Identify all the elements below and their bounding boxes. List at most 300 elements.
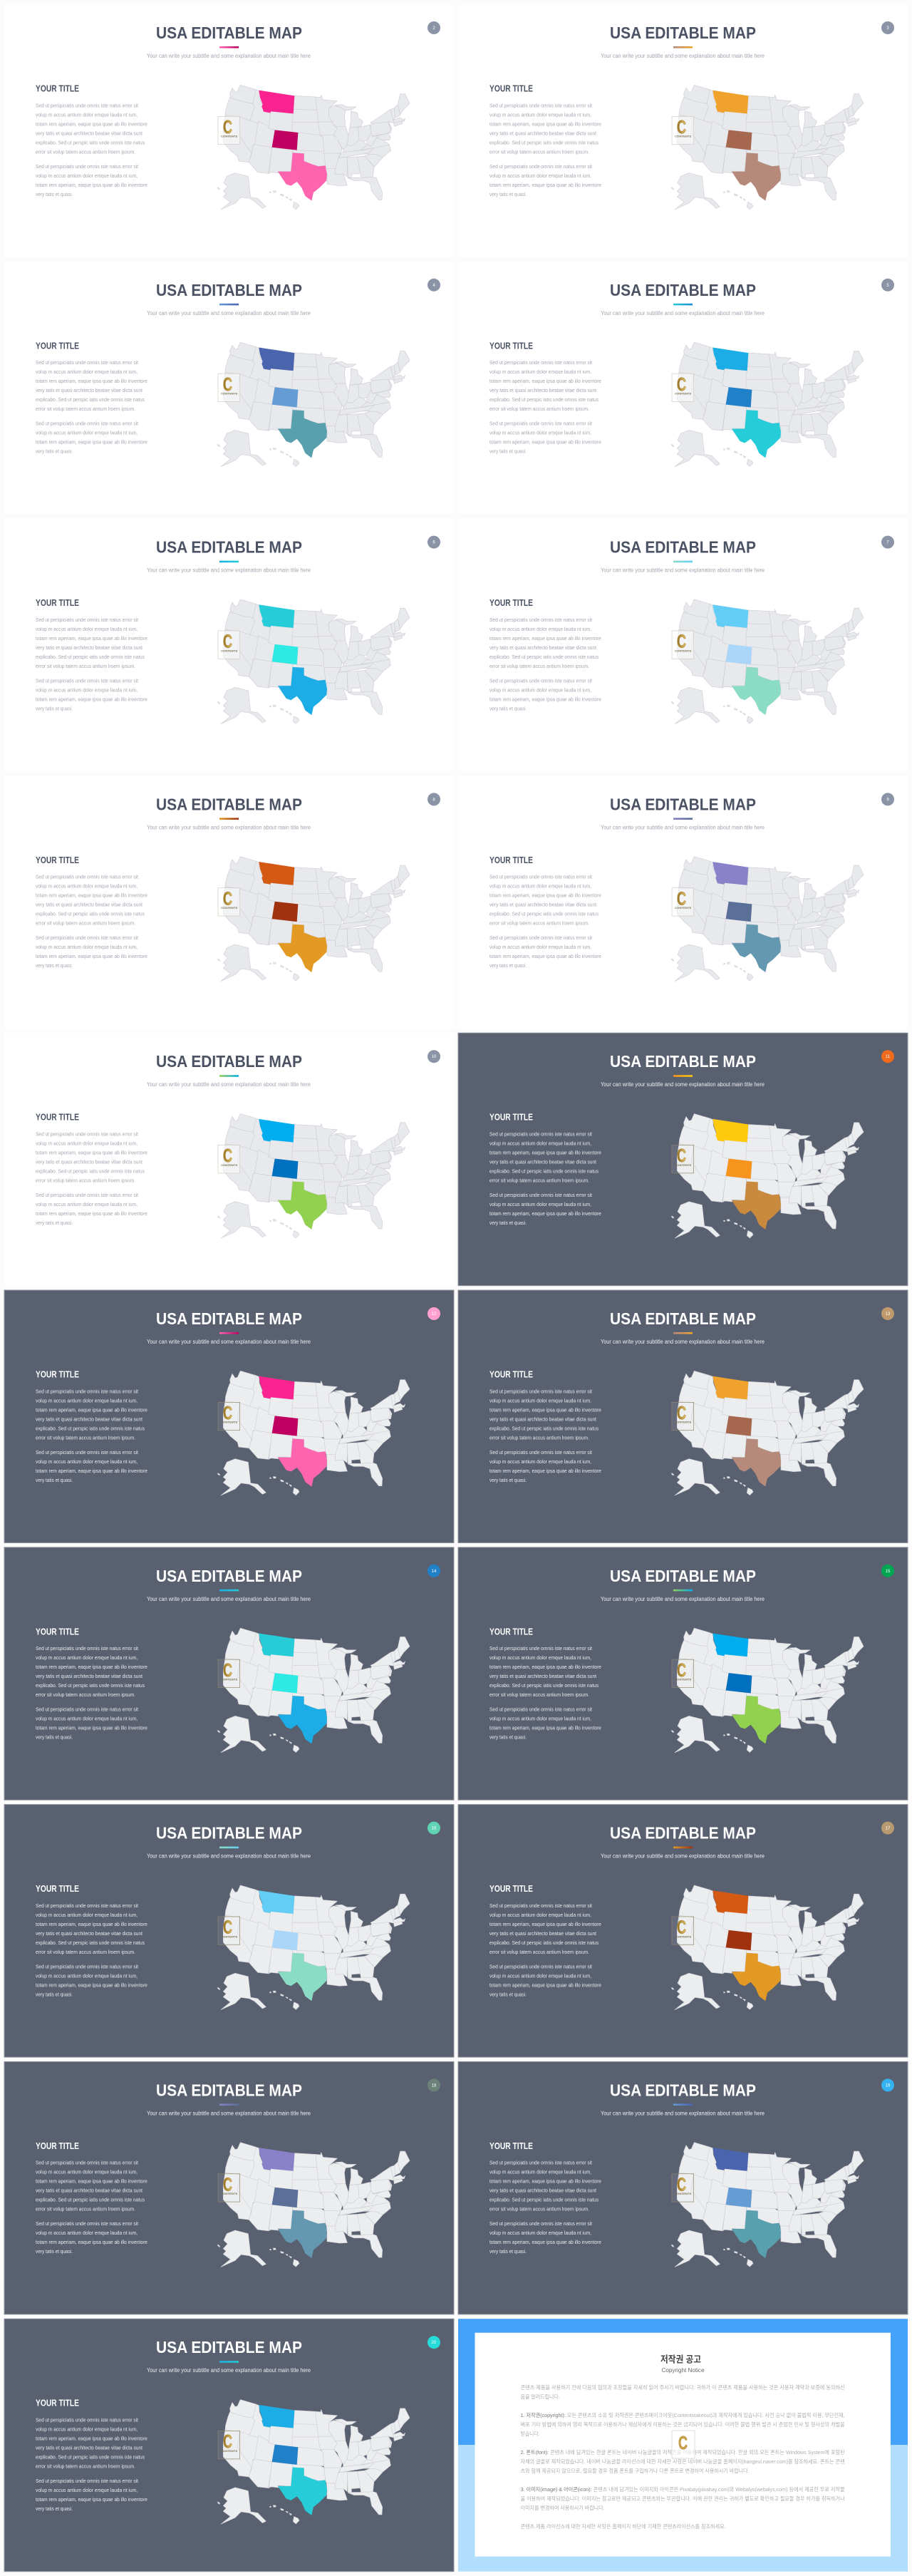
body text: Sed ut perspiciatis unde omnis iste natus error sit xyxy=(489,1130,592,1137)
blue band top xyxy=(458,2319,908,2445)
page number badge xyxy=(881,536,894,549)
intro paragraph: 콘텐츠 제품을 사용하기 전에 다음의 협의과 조항들을 자세히 읽어 주시기 바랍니다. 귀하가 이 콘텐츠 제품을 사용하는 것은 사용자 계약과 보증에 동의하신 xyxy=(521,2384,845,2391)
body text xyxy=(489,1902,601,1997)
section font: 2. 폰트(font): 콘텐츠 내에 담겨있는 한글 폰트는 네이버 나눔글꼴의 저작권을 이용하여 제작되었습니다. 한글 외의 모든 폰트는 Windows System에 포함된 xyxy=(521,2449,845,2456)
body text: error sit volup tatem accus antium lroem ipsum. xyxy=(489,920,589,927)
body text: very tatis et quasi architecto beatae vitae dicta sunt xyxy=(36,1930,142,1937)
page number badge: 19 xyxy=(886,2083,891,2088)
body text: volup m accus antium dolor emque lauda nt ium, xyxy=(489,1912,591,1918)
body text: error sit volup tatem accus antium lroem ipsum. xyxy=(489,663,589,669)
map of USA: C xyxy=(223,631,232,652)
body text: Sed ut perspiciatis unde omnis iste natus error sit xyxy=(489,102,592,108)
map of USA xyxy=(671,857,864,981)
panel: slide 18 xyxy=(4,2061,454,2314)
body text: error sit volup tatem accus antium lroem ipsum. xyxy=(489,148,589,155)
subtitle: Your can write your subtitle and some explanation about main title here xyxy=(601,1081,765,1088)
accent bar xyxy=(219,1847,239,1848)
body text: volup m accus antium dolor emque lauda nt ium, xyxy=(36,369,138,375)
logo watermark: C xyxy=(678,2432,688,2453)
body text xyxy=(36,1645,147,1741)
map of USA: C xyxy=(223,1145,232,1166)
body text: error sit volup tatem accus antium lroem ipsum. xyxy=(36,2463,135,2469)
body text: explicabo. Sed ut perspic iatis unde omnis iste natus xyxy=(36,1939,145,1946)
slide background xyxy=(4,519,454,771)
map of USA: C xyxy=(677,1659,686,1681)
body text: volup m accus antium dolor emque lauda nt ium, xyxy=(489,1716,591,1722)
slide background xyxy=(4,776,454,1029)
body text: Sed ut perspiciatis unde omnis iste natus error sit xyxy=(36,1449,138,1456)
white card xyxy=(475,2333,891,2557)
heading: YOUR TITLE xyxy=(36,1884,79,1894)
heading: YOUR TITLE xyxy=(36,1627,79,1637)
page number badge: 14 xyxy=(432,1570,437,1574)
subtitle: Your can write your subtitle and some explanation about main title here xyxy=(147,1596,311,1602)
slide background xyxy=(4,1547,454,1800)
slide background xyxy=(458,776,908,1029)
body text: explicabo. Sed ut perspic iatis unde omnis iste natus xyxy=(36,2453,145,2460)
title: USA EDITABLE MAP xyxy=(610,795,756,813)
body text: totam rem aperiam, eaque ipsa quae ab illo inventore xyxy=(489,892,601,899)
body text: very tatis et quasi. xyxy=(489,1991,527,1997)
heading english: Copyright Notice xyxy=(661,2366,705,2374)
body text: Sed ut perspiciatis unde omnis iste natus error sit xyxy=(489,1706,592,1713)
body text: very tatis et quasi. xyxy=(489,1477,527,1483)
body text: Sed ut perspiciatis unde omnis iste natus error sit xyxy=(36,102,138,108)
panel: slide 19 xyxy=(458,2061,908,2314)
body text: very tatis et quasi architecto beatae vitae dicta sunt xyxy=(36,2188,142,2194)
body text: totam rem aperiam, eaque ipsa quae ab illo inventore xyxy=(36,1921,147,1927)
body text: totam rem aperiam, eaque ipsa quae ab illo inventore xyxy=(489,439,601,445)
subtitle: Your can write your subtitle and some explanation about main title here xyxy=(147,1853,311,1860)
panel: copyright notice xyxy=(458,2319,908,2572)
body text: very tatis et quasi. xyxy=(489,191,527,197)
body text: very tatis et quasi architecto beatae vitae dicta sunt xyxy=(489,1930,596,1937)
section copyright: 배포 기타 방법에 의하여 영리 목적으로 이용하거나 제삼자에게 이용하는 것은 금지되어 있습니다. 이러한 불법 행위 발견 시 준엄한 민사 및 형사상의 처벌을 xyxy=(521,2421,845,2428)
title: USA EDITABLE MAP xyxy=(156,538,302,557)
body text: very tatis et quasi. xyxy=(36,1477,73,1483)
slide background xyxy=(458,4,908,257)
body text: Sed ut perspiciatis unde omnis iste natus error sit xyxy=(489,1388,592,1394)
map of USA: CONTENTS xyxy=(221,135,238,138)
body text xyxy=(36,102,147,197)
map of USA: C xyxy=(223,1659,232,1681)
title: USA EDITABLE MAP xyxy=(156,795,302,813)
body text: volup m accus antium dolor emque lauda nt ium, xyxy=(36,883,138,890)
page number badge xyxy=(881,1307,894,1320)
body text: error sit volup tatem accus antium lroem ipsum. xyxy=(36,148,135,155)
map of USA: C xyxy=(223,116,232,138)
body text: error sit volup tatem accus antium lroem ipsum. xyxy=(36,2206,135,2212)
body text: totam rem aperiam, eaque ipsa quae ab illo inventore xyxy=(489,1982,601,1988)
slide background xyxy=(4,1805,454,2057)
body text: volup m accus antium dolor emque lauda nt ium, xyxy=(36,1716,138,1722)
body text: very tatis et quasi. xyxy=(36,191,73,197)
subtitle: Your can write your subtitle and some explanation about main title here xyxy=(147,824,311,830)
page number badge xyxy=(428,279,440,292)
panel: slide 7 xyxy=(458,519,908,771)
map of USA: CONTENTS xyxy=(221,1163,238,1167)
body text: totam rem aperiam, eaque ipsa quae ab illo inventore xyxy=(36,2239,147,2245)
page number badge: 2 xyxy=(432,26,435,31)
page number badge: 13 xyxy=(886,1312,891,1317)
body text: very tatis et quasi. xyxy=(36,705,73,711)
section images and icons: 을 이용하여 제작되었습니다. 이미지는 참고로만 제공되고 콘텐츠와는 무관합니다. 이에 관한 권리는 귀하가 별도로 확인하고 필요할 경우 허가를 취득하거나 xyxy=(521,2495,845,2502)
page number badge xyxy=(428,2336,440,2349)
body text: volup m accus antium dolor emque lauda nt ium, xyxy=(489,2169,591,2175)
map of USA: CONTENTS xyxy=(675,906,692,910)
subtitle: Your can write your subtitle and some explanation about main title here xyxy=(601,53,765,59)
subtitle: Your can write your subtitle and some explanation about main title here xyxy=(601,1853,765,1860)
body text: explicabo. Sed ut perspic iatis unde omnis iste natus xyxy=(489,1425,598,1431)
page number badge xyxy=(428,536,440,549)
body text xyxy=(489,617,601,711)
body text: volup m accus antium dolor emque lauda nt ium, xyxy=(36,172,138,179)
body text: volup m accus antium dolor emque lauda nt ium, xyxy=(36,1972,138,1979)
body text xyxy=(36,2160,147,2255)
title: USA EDITABLE MAP xyxy=(610,538,756,557)
map of USA xyxy=(217,1628,410,1753)
body text: Sed ut perspiciatis unde omnis iste natus error sit xyxy=(36,1706,138,1713)
map of USA xyxy=(217,1114,410,1238)
body text: explicabo. Sed ut perspic iatis unde omnis iste natus xyxy=(36,396,145,403)
map of USA: CONTENTS xyxy=(221,649,238,652)
body text: volup m accus antium dolor emque lauda nt ium, xyxy=(489,1397,591,1403)
accent bar xyxy=(219,818,239,820)
body text: Sed ut perspiciatis unde omnis iste natus error sit xyxy=(36,1388,138,1394)
body text: totam rem aperiam, eaque ipsa quae ab illo inventore xyxy=(36,1982,147,1988)
heading: YOUR TITLE xyxy=(36,341,79,351)
body text: totam rem aperiam, eaque ipsa quae ab illo inventore xyxy=(489,182,601,188)
body text: explicabo. Sed ut perspic iatis unde omnis iste natus xyxy=(489,139,598,145)
panel: slide 4 xyxy=(4,262,454,514)
body text: very tatis et quasi. xyxy=(489,962,527,969)
heading: YOUR TITLE xyxy=(489,1113,533,1123)
map of USA xyxy=(671,342,864,467)
body text: totam rem aperiam, eaque ipsa quae ab illo inventore xyxy=(36,696,147,702)
body text: very tatis et quasi architecto beatae vitae dicta sunt xyxy=(36,1158,142,1165)
map of USA: C xyxy=(677,373,686,395)
body text: Sed ut perspiciatis unde omnis iste natus error sit xyxy=(489,874,592,880)
panel: slide 20 xyxy=(4,2319,454,2572)
body text: volup m accus antium dolor emque lauda nt ium, xyxy=(36,686,138,693)
body text: totam rem aperiam, eaque ipsa quae ab illo inventore xyxy=(489,1921,601,1927)
slide background xyxy=(4,1290,454,1542)
subtitle: Your can write your subtitle and some explanation about main title here xyxy=(601,1596,765,1602)
body text: very tatis et quasi. xyxy=(36,2505,73,2512)
body text: very tatis et quasi architecto beatae vitae dicta sunt xyxy=(489,1673,596,1679)
map of USA: CONTENTS xyxy=(221,1677,238,1681)
heading: YOUR TITLE xyxy=(489,855,533,865)
map of USA: CONTENTS xyxy=(675,135,692,138)
body text: error sit volup tatem accus antium lroem ipsum. xyxy=(489,2206,589,2212)
map of USA: C xyxy=(677,1402,686,1423)
page number badge: 9 xyxy=(886,798,889,802)
body text: very tatis et quasi architecto beatae vitae dicta sunt xyxy=(489,902,596,908)
body text: volup m accus antium dolor emque lauda nt ium, xyxy=(489,1458,591,1465)
subtitle: Your can write your subtitle and some explanation about main title here xyxy=(601,567,765,574)
map of USA xyxy=(671,1628,864,1753)
panel: slide 2 xyxy=(4,4,454,257)
title: USA EDITABLE MAP xyxy=(610,1052,756,1071)
body text: explicabo. Sed ut perspic iatis unde omnis iste natus xyxy=(36,2197,145,2203)
body text: very tatis et quasi architecto beatae vitae dicta sunt xyxy=(36,130,142,136)
slide background xyxy=(4,2319,454,2572)
map of USA: C xyxy=(677,116,686,138)
map of USA: CONTENTS xyxy=(221,906,238,910)
body text: error sit volup tatem accus antium lroem ipsum. xyxy=(489,1177,589,1183)
section copyright xyxy=(521,2412,845,2437)
accent bar xyxy=(219,2361,239,2363)
body text: very tatis et quasi architecto beatae vitae dicta sunt xyxy=(489,1416,596,1422)
map of USA xyxy=(217,342,410,467)
section font: 자체의 글꼴로 제작되었습니다. 네이버 나눔글꼴 라이선스에 대한 자세한 사항은 네이버 나눔글꼴 홈페이지(hangeul.naver.com)를 참조하세요. 폰트는 콘텐 xyxy=(521,2458,845,2465)
body text: very tatis et quasi. xyxy=(489,448,527,455)
subtitle: Your can write your subtitle and some explanation about main title here xyxy=(147,1339,311,1345)
accent bar xyxy=(673,1332,693,1334)
section images and icons: 3. 이미지(image) & 아이콘(icon): 콘텐츠 내에 담겨있는 이미지와 아이콘은 Pixabay(pixabay.com)와 Webalys(webalys.com) 등에서 제공한 무료 저작물 xyxy=(521,2486,845,2493)
map of USA xyxy=(217,857,410,981)
body text: error sit volup tatem accus antium lroem ipsum. xyxy=(36,1949,135,1955)
title: USA EDITABLE MAP xyxy=(156,1567,302,1585)
body text: totam rem aperiam, eaque ipsa quae ab illo inventore xyxy=(36,378,147,384)
body text: very tatis et quasi architecto beatae vitae dicta sunt xyxy=(36,1416,142,1422)
accent bar xyxy=(219,561,239,562)
map of USA: CONTENTS xyxy=(675,1163,692,1167)
body text: Sed ut perspiciatis unde omnis iste natus error sit xyxy=(36,2220,138,2227)
subtitle: Your can write your subtitle and some explanation about main title here xyxy=(601,824,765,830)
panel: slide 5 xyxy=(458,262,908,514)
body text xyxy=(36,617,147,711)
map of USA xyxy=(217,599,410,724)
panel: slide 17 xyxy=(458,1805,908,2057)
body text: totam rem aperiam, eaque ipsa quae ab illo inventore xyxy=(489,1468,601,1474)
map of USA xyxy=(671,2143,864,2267)
page number badge: 7 xyxy=(886,541,889,545)
body text xyxy=(36,1902,147,1997)
map of USA: CONTENTS xyxy=(221,2192,238,2195)
body text: very tatis et quasi. xyxy=(489,1220,527,1226)
body text: explicabo. Sed ut perspic iatis unde omnis iste natus xyxy=(36,1168,145,1174)
slide background xyxy=(458,1547,908,1800)
page number badge xyxy=(881,1050,894,1063)
accent bar xyxy=(673,304,693,305)
body text: very tatis et quasi architecto beatae vitae dicta sunt xyxy=(489,1158,596,1165)
body text: volup m accus antium dolor emque lauda nt ium, xyxy=(36,1201,138,1207)
heading: YOUR TITLE xyxy=(36,2141,79,2151)
page number badge xyxy=(428,1822,440,1835)
map of USA: C xyxy=(677,631,686,652)
body text: explicabo. Sed ut perspic iatis unde omnis iste natus xyxy=(36,911,145,917)
title: USA EDITABLE MAP xyxy=(156,2338,302,2356)
body text: explicabo. Sed ut perspic iatis unde omnis iste natus xyxy=(489,2197,598,2203)
body text: very tatis et quasi architecto beatae vitae dicta sunt xyxy=(489,644,596,651)
body text: Sed ut perspiciatis unde omnis iste natus error sit xyxy=(36,874,138,880)
body text: Sed ut perspiciatis unde omnis iste natus error sit xyxy=(36,1963,138,1969)
map of USA: CONTENTS xyxy=(675,1421,692,1424)
body text: very tatis et quasi. xyxy=(489,1734,527,1741)
closing note: 콘텐츠 제품 라이선스에 대한 자세한 사항은 홈페이지 하단에 기재한 콘텐츠라이선스를 참조하세요. xyxy=(521,2523,726,2530)
heading: YOUR TITLE xyxy=(36,855,79,865)
accent bar xyxy=(673,46,693,48)
heading korean: 저작권 공고 xyxy=(660,2354,701,2365)
body text: totam rem aperiam, eaque ipsa quae ab illo inventore xyxy=(36,953,147,959)
map of USA: CONTENTS xyxy=(675,391,692,395)
body text xyxy=(489,1645,601,1741)
map of USA xyxy=(671,1885,864,2010)
body text: totam rem aperiam, eaque ipsa quae ab illo inventore xyxy=(489,378,601,384)
map of USA: C xyxy=(677,887,686,909)
body text: totam rem aperiam, eaque ipsa quae ab illo inventore xyxy=(36,892,147,899)
accent bar xyxy=(673,2103,693,2106)
body text: very tatis et quasi architecto beatae vitae dicta sunt xyxy=(36,2444,142,2451)
map of USA xyxy=(217,1885,410,2010)
page number badge xyxy=(881,21,894,34)
body text: totam rem aperiam, eaque ipsa quae ab illo inventore xyxy=(36,2435,147,2441)
body text: totam rem aperiam, eaque ipsa quae ab illo inventore xyxy=(489,1664,601,1670)
page number badge: 20 xyxy=(432,2341,437,2345)
page number badge xyxy=(881,279,894,292)
heading: YOUR TITLE xyxy=(489,1370,533,1380)
section images and icons xyxy=(521,2486,845,2511)
body text xyxy=(489,1130,601,1226)
heading: YOUR TITLE xyxy=(36,598,79,608)
body text: volup m accus antium dolor emque lauda nt ium, xyxy=(36,2230,138,2236)
body text: totam rem aperiam, eaque ipsa quae ab illo inventore xyxy=(36,182,147,188)
slide background xyxy=(458,519,908,771)
title: USA EDITABLE MAP xyxy=(156,24,302,42)
map of USA: C xyxy=(677,1917,686,1938)
body text: volup m accus antium dolor emque lauda nt ium, xyxy=(489,369,591,375)
body text: Sed ut perspiciatis unde omnis iste natus error sit xyxy=(489,934,592,941)
body text xyxy=(489,1388,601,1483)
body text: explicabo. Sed ut perspic iatis unde omnis iste natus xyxy=(36,1682,145,1689)
title: USA EDITABLE MAP xyxy=(610,1309,756,1328)
body text: error sit volup tatem accus antium lroem ipsum. xyxy=(36,663,135,669)
page number badge: 16 xyxy=(432,1827,437,1831)
page number badge xyxy=(428,793,440,805)
section copyright: 받습니다. xyxy=(521,2431,540,2437)
slide background xyxy=(4,262,454,514)
title: USA EDITABLE MAP xyxy=(156,281,302,299)
panel: slide 12 xyxy=(4,1290,454,1542)
body text xyxy=(36,1130,147,1226)
map of USA: C xyxy=(677,2173,686,2195)
body text: Sed ut perspiciatis unde omnis iste natus error sit xyxy=(36,359,138,366)
subtitle: Your can write your subtitle and some explanation about main title here xyxy=(601,310,765,316)
body text xyxy=(489,2160,601,2255)
body text: Sed ut perspiciatis unde omnis iste natus error sit xyxy=(36,617,138,623)
body text: volup m accus antium dolor emque lauda nt ium, xyxy=(36,1397,138,1403)
page number badge: 8 xyxy=(432,798,435,802)
title: USA EDITABLE MAP xyxy=(610,1824,756,1843)
body text: volup m accus antium dolor emque lauda nt ium, xyxy=(36,626,138,632)
body text: volup m accus antium dolor emque lauda nt ium, xyxy=(489,686,591,693)
heading: YOUR TITLE xyxy=(36,2399,79,2408)
body text: Sed ut perspiciatis unde omnis iste natus error sit xyxy=(36,934,138,941)
page number badge: 10 xyxy=(432,1055,437,1059)
body text: explicabo. Sed ut perspic iatis unde omnis iste natus xyxy=(36,654,145,660)
body text: very tatis et quasi architecto beatae vitae dicta sunt xyxy=(489,2188,596,2194)
map of USA: CONTENTS xyxy=(675,1677,692,1681)
title: USA EDITABLE MAP xyxy=(156,1309,302,1328)
body text: totam rem aperiam, eaque ipsa quae ab illo inventore xyxy=(36,1468,147,1474)
body text: very tatis et quasi architecto beatae vitae dicta sunt xyxy=(36,644,142,651)
body text xyxy=(489,102,601,197)
section images and icons: 이미지를 변경하여 사용하시기 바랍니다. xyxy=(521,2505,605,2511)
body text: volup m accus antium dolor emque lauda nt ium, xyxy=(36,2169,138,2175)
page number badge: 18 xyxy=(432,2083,437,2088)
panel: slide 15 xyxy=(458,1547,908,1800)
body text: volup m accus antium dolor emque lauda nt ium, xyxy=(36,2487,138,2493)
body text: Sed ut perspiciatis unde omnis iste natus error sit xyxy=(489,1963,592,1969)
body text: error sit volup tatem accus antium lroem ipsum. xyxy=(36,1691,135,1698)
body text: very tatis et quasi architecto beatae vitae dicta sunt xyxy=(36,902,142,908)
accent bar xyxy=(673,1590,693,1591)
slide background xyxy=(458,262,908,514)
map of USA: CONTENTS xyxy=(221,1934,238,1938)
body text: totam rem aperiam, eaque ipsa quae ab illo inventore xyxy=(36,2496,147,2503)
map of USA: C xyxy=(223,2173,232,2195)
subtitle: Your can write your subtitle and some explanation about main title here xyxy=(147,567,311,574)
slide background xyxy=(458,2061,908,2314)
body text: volup m accus antium dolor emque lauda nt ium, xyxy=(489,172,591,179)
map of USA xyxy=(671,1114,864,1238)
body text: Sed ut perspiciatis unde omnis iste natus error sit xyxy=(489,2160,592,2166)
body text: Sed ut perspiciatis unde omnis iste natus error sit xyxy=(489,677,592,684)
body text: totam rem aperiam, eaque ipsa quae ab illo inventore xyxy=(36,1725,147,1731)
accent bar xyxy=(219,1332,239,1334)
body text: totam rem aperiam, eaque ipsa quae ab illo inventore xyxy=(489,1725,601,1731)
page number badge: 4 xyxy=(432,284,435,288)
panel: slide 11 xyxy=(458,1033,908,1286)
page number badge: 17 xyxy=(886,1827,891,1831)
map of USA xyxy=(671,1371,864,1495)
subtitle: Your can write your subtitle and some explanation about main title here xyxy=(147,1081,311,1088)
title: USA EDITABLE MAP xyxy=(156,1052,302,1071)
page number badge xyxy=(881,793,894,805)
heading: YOUR TITLE xyxy=(489,2141,533,2151)
body text: Sed ut perspiciatis unde omnis iste natus error sit xyxy=(36,2478,138,2484)
panel: slide 10 xyxy=(4,1033,454,1286)
title: USA EDITABLE MAP xyxy=(156,2081,302,2099)
subtitle: Your can write your subtitle and some explanation about main title here xyxy=(147,53,311,59)
panel: slide 6 xyxy=(4,519,454,771)
section copyright: 1. 저작권(copyright): 모든 콘텐츠의 소유 및 저작권은 콘텐츠메이크아웃(Contentstakeout)과 제작자에게 있습니다. 사전 승낙 없이 불법적 이용, 무단전재, xyxy=(521,2412,845,2418)
intro paragraph: 음을 알려드립니다. xyxy=(521,2394,560,2400)
accent bar xyxy=(219,46,239,48)
subtitle: Your can write your subtitle and some explanation about main title here xyxy=(147,2367,311,2374)
heading: YOUR TITLE xyxy=(489,598,533,608)
title: USA EDITABLE MAP xyxy=(610,2081,756,2099)
panel: slide 13 xyxy=(458,1290,908,1542)
slide background xyxy=(4,4,454,257)
body text: volup m accus antium dolor emque lauda nt ium, xyxy=(36,944,138,950)
body text: error sit volup tatem accus antium lroem ipsum. xyxy=(489,406,589,412)
panel: slide 16 xyxy=(4,1805,454,2057)
body text: totam rem aperiam, eaque ipsa quae ab illo inventore xyxy=(489,635,601,642)
body text: totam rem aperiam, eaque ipsa quae ab illo inventore xyxy=(36,120,147,127)
heading: YOUR TITLE xyxy=(489,341,533,351)
body text: very tatis et quasi. xyxy=(489,2248,527,2255)
body text: very tatis et quasi. xyxy=(489,705,527,711)
body text: Sed ut perspiciatis unde omnis iste natus error sit xyxy=(36,1902,138,1909)
heading: YOUR TITLE xyxy=(36,1113,79,1123)
section font: 츠와 함께 제공되지 않으므로, 필요할 경우 정품 폰트를 구입하거나 다른 폰트로 변경하여 사용하시기 바랍니다. xyxy=(521,2468,750,2474)
page number badge: 11 xyxy=(886,1055,891,1059)
body text xyxy=(489,874,601,969)
body text: Sed ut perspiciatis unde omnis iste natus error sit xyxy=(489,1645,592,1652)
accent bar xyxy=(219,304,239,305)
